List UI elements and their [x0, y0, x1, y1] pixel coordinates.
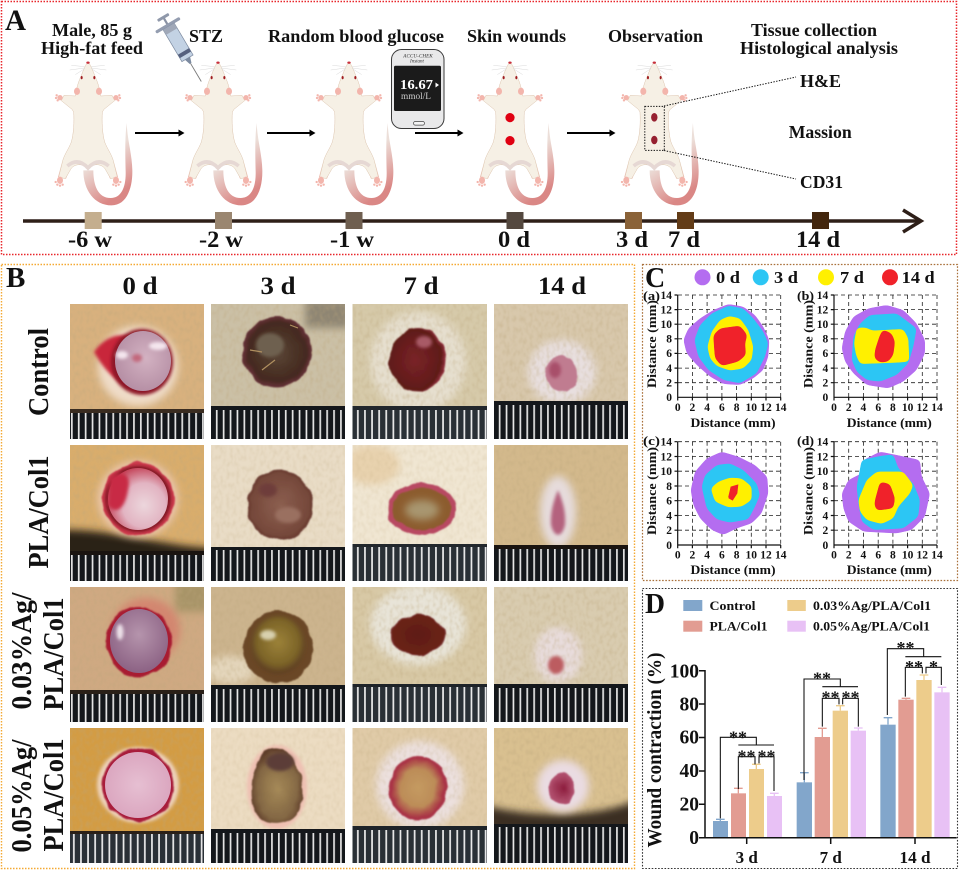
- chart (c): 6: [719, 550, 725, 562]
- y axis tick labels: 60: [680, 728, 699, 748]
- chart (d): 6: [823, 496, 829, 508]
- chart (b): 4: [823, 363, 829, 375]
- icon: glucometer: mmol/L: [401, 91, 431, 101]
- chart (c): 10: [746, 550, 757, 562]
- chart (d): Distance (mm): [800, 447, 815, 535]
- y axis tick labels: [670, 662, 699, 849]
- panel A: experimental timeline: [2, 2, 956, 254]
- chart (d): 2: [823, 525, 829, 537]
- photo: Control 0 d: [70, 304, 204, 439]
- icon: syringe: [150, 9, 213, 89]
- y axis label: Wound contraction (%): [644, 652, 666, 848]
- chart (a): 4: [666, 363, 672, 375]
- chart (c): 4: [666, 510, 672, 522]
- panel B: wound photographs: [2, 262, 638, 868]
- significance stars: **: [822, 688, 840, 708]
- chart (b): Distance (mm): [800, 300, 815, 388]
- panel letter D: D: [645, 589, 665, 620]
- chart (a): 8: [666, 334, 672, 346]
- chart (c): 12: [760, 550, 772, 562]
- chart (c): 4: [704, 550, 710, 562]
- significance stars: **: [905, 657, 923, 677]
- timeline labels: 14 d: [796, 227, 840, 252]
- chart (d): 4: [861, 550, 867, 562]
- chart (b): Distance (mm): [847, 415, 932, 430]
- row label PLA/Col1: PLA/Col1: [24, 456, 55, 568]
- photo: 0.03%Ag 14 d: [494, 587, 628, 722]
- chart (a): 12: [660, 304, 672, 316]
- chart (d): 12: [817, 452, 829, 464]
- chart (d): 0: [823, 540, 829, 552]
- photo: 0.03%Ag 0 d: [70, 587, 204, 722]
- arrow 3: [415, 130, 464, 136]
- chart (b): [797, 288, 943, 430]
- photo: Control 14 d: [494, 304, 628, 439]
- row label 0.05%Ag/PLA/Col1: [7, 738, 70, 852]
- significance stars: **: [813, 668, 831, 688]
- timeline labels: 3 d: [616, 227, 648, 252]
- photo: 0.03%Ag 7 d: [352, 587, 487, 722]
- chart (a): 14: [775, 402, 787, 414]
- heading: male high-fat feed: Male, 85 g: [52, 20, 132, 40]
- chart (d): [797, 433, 943, 577]
- timeline labels: -1 w: [330, 227, 374, 252]
- chart (b): 12: [917, 402, 928, 414]
- y axis tick labels: 80: [680, 694, 699, 716]
- label Massion: Massion: [789, 122, 852, 142]
- chart (a): Distance (mm): [644, 300, 659, 388]
- y axis tick labels: 20: [680, 794, 699, 816]
- label H&E: H&E: [800, 71, 841, 91]
- chart (b): 14: [817, 290, 829, 302]
- significance stars: **: [729, 728, 747, 748]
- chart (b): 2: [846, 402, 852, 414]
- chart (a): 0: [666, 392, 672, 404]
- chart (a): 6: [666, 348, 672, 360]
- x axis labels: 3 d: [736, 848, 758, 867]
- chart (d): 10: [817, 466, 829, 478]
- chart (c): 8: [666, 481, 672, 493]
- heading: tissue collection: Tissue collection: [751, 20, 877, 40]
- photo: 0.03%Ag 3 d: [211, 587, 345, 722]
- photo: 0.05%Ag 3 d: [211, 728, 345, 863]
- timeline labels: [68, 227, 840, 252]
- significance brackets: [720, 649, 941, 818]
- row label 0.03%Ag/PLA/Col1: [7, 591, 70, 710]
- chart (d): 10: [902, 550, 914, 562]
- significance stars: **: [896, 638, 914, 658]
- chart (b): 14: [931, 402, 943, 414]
- chart (c): 12: [660, 452, 672, 464]
- row label Control: Control: [24, 328, 55, 416]
- timeline axis: [23, 210, 921, 232]
- timeline labels: -6 w: [68, 227, 112, 252]
- chart (a): Distance (mm): [690, 415, 776, 430]
- chart (c): 14: [775, 550, 787, 562]
- chart (c): 0: [675, 550, 681, 562]
- column headers: [122, 273, 586, 300]
- chart (b): 8: [823, 334, 829, 346]
- chart (b): 12: [817, 304, 829, 316]
- significance stars: [729, 638, 938, 766]
- photo: Control 3 d: [211, 304, 345, 439]
- legend: days: 0 d: [716, 268, 741, 287]
- heading: male high-fat feed: [41, 20, 143, 58]
- chart (d): (d): [797, 433, 814, 448]
- heading: male high-fat feed: High-fat feed: [41, 38, 143, 58]
- photo: 0.05%Ag 0 d: [70, 728, 204, 863]
- chart (a): 12: [760, 402, 772, 414]
- heading: tissue collection: [740, 20, 898, 58]
- legend: days: 3 d: [774, 268, 799, 287]
- legend: groups: Control: [710, 598, 756, 613]
- legend: groups: [683, 598, 931, 634]
- timeline labels: 7 d: [668, 227, 700, 252]
- legend: days: [694, 268, 935, 287]
- chart (c): 14: [660, 437, 672, 449]
- heading: STZ: STZ: [189, 26, 223, 46]
- chart (b): 0: [831, 402, 837, 414]
- chart (a): 10: [660, 319, 672, 331]
- chart (c): (c): [643, 433, 660, 448]
- chart (c): 8: [734, 550, 740, 562]
- photo: PLA/Col1 14 d: [494, 445, 628, 581]
- panel D: wound contraction bar chart: [642, 588, 958, 868]
- chart (d): 14: [931, 550, 943, 562]
- chart (d): 4: [823, 510, 829, 522]
- panel letter C: C: [645, 263, 665, 294]
- icon: glucometer: Instant: [409, 60, 425, 64]
- photo: Control 7 d: [352, 304, 487, 439]
- significance stars: **: [842, 688, 860, 708]
- chart (d): 12: [917, 550, 928, 562]
- row label 0.03%Ag/PLA/Col1: PLA/Col1: [39, 598, 70, 710]
- chart (c): 10: [660, 466, 672, 478]
- row label 0.05%Ag/PLA/Col1: PLA/Col1: [39, 738, 70, 852]
- x axis labels: [736, 848, 931, 867]
- heading: random blood glucose: Random blood glucose: [268, 26, 444, 46]
- photo: PLA/Col1 3 d: [211, 445, 345, 581]
- significance stars: *: [929, 657, 938, 677]
- row label 0.03%Ag/PLA/Col1: 0.03%Ag/: [7, 591, 38, 710]
- panel letter A: A: [5, 4, 26, 37]
- chart (b): 0: [823, 392, 829, 404]
- y axis tick labels: 0: [689, 828, 699, 849]
- icon: rat 4 with skin wounds: [477, 62, 554, 205]
- chart (d): 8: [823, 481, 829, 493]
- icon: glucometer: 16.67: [400, 77, 433, 92]
- chart (c): Distance (mm): [690, 562, 776, 577]
- column headers: 3 d: [260, 273, 296, 300]
- legend: days: 7 d: [840, 268, 865, 287]
- label CD31: CD31: [800, 172, 843, 192]
- chart (d): 8: [890, 550, 896, 562]
- chart (b): 10: [817, 319, 829, 331]
- heading: skin wounds: Skin wounds: [467, 26, 566, 46]
- legend: groups: PLA/Col1: [710, 618, 768, 634]
- photo: 0.05%Ag 14 d: [494, 728, 628, 863]
- legend: days: 14 d: [902, 268, 935, 287]
- y axis tick labels: 40: [680, 761, 699, 782]
- significance stars: **: [758, 746, 776, 766]
- column headers: 0 d: [122, 273, 158, 300]
- arrow 1: [135, 130, 184, 136]
- column headers: 14 d: [538, 273, 586, 300]
- chart (a): (a): [643, 288, 660, 303]
- photo: PLA/Col1 0 d: [70, 445, 204, 581]
- row label 0.05%Ag/PLA/Col1: 0.05%Ag/: [7, 738, 38, 852]
- chart (d): 14: [817, 437, 829, 449]
- icon: rat 5 with sampled region: [621, 62, 699, 205]
- photo: 0.05%Ag 7 d: [352, 728, 487, 863]
- x axis labels: 14 d: [900, 848, 931, 867]
- chart (b): 10: [902, 402, 914, 414]
- chart (a): 10: [746, 402, 757, 414]
- legend: groups: 0.03%Ag/PLA/Col1: [813, 598, 931, 613]
- timeline labels: -2 w: [199, 227, 243, 252]
- legend: groups: 0.05%Ag/PLA/Col1: [813, 618, 930, 634]
- y axis tick labels: 100: [670, 662, 699, 682]
- panel C: wound closure traces: [642, 263, 958, 580]
- chart (b): 2: [823, 378, 829, 390]
- chart (c): Distance (mm): [644, 447, 659, 535]
- timeline labels: 0 d: [498, 227, 530, 252]
- photo: PLA/Col1 7 d: [352, 445, 487, 581]
- chart (a): 2: [690, 402, 696, 414]
- chart (c): 2: [690, 550, 696, 562]
- chart (b): 6: [875, 402, 881, 414]
- arrow 2: [267, 130, 316, 136]
- chart (a): [643, 288, 787, 430]
- icon: glucometer: ACCU-CHEK: [402, 54, 433, 60]
- chart (d): 6: [875, 550, 881, 562]
- chart (b): 6: [823, 348, 829, 360]
- dotted leader lines: [664, 77, 796, 179]
- chart (c): 0: [666, 540, 672, 552]
- bars and error bars: [713, 675, 950, 838]
- x axis labels: 7 d: [820, 848, 842, 867]
- arrow 4: [567, 130, 616, 136]
- chart (c): [643, 433, 787, 577]
- column headers: 7 d: [404, 273, 439, 300]
- chart (d): 2: [846, 550, 852, 562]
- chart (a): 4: [704, 402, 710, 414]
- chart (c): 2: [666, 525, 672, 537]
- chart (d): Distance (mm): [847, 562, 932, 577]
- heading: tissue collection: Histological analysis: [740, 38, 898, 58]
- icon: rat 2: [185, 62, 262, 205]
- icon: rat 1: [55, 62, 132, 205]
- chart (b): 8: [890, 402, 896, 414]
- heading: observation: Observation: [608, 26, 703, 46]
- chart (b): (b): [797, 288, 814, 303]
- chart (a): 8: [734, 402, 740, 414]
- chart (a): 14: [660, 290, 672, 302]
- chart (d): 0: [831, 550, 837, 562]
- icon: rat 3: [316, 62, 393, 205]
- icon: glucometer: [392, 50, 444, 128]
- panel letter B: B: [6, 262, 25, 294]
- chart (c): 6: [666, 496, 672, 508]
- chart (a): 2: [666, 378, 672, 390]
- chart (b): 4: [861, 402, 867, 414]
- significance stars: **: [738, 746, 756, 766]
- chart (a): 0: [675, 402, 681, 414]
- axes: [699, 670, 957, 844]
- chart (a): 6: [719, 402, 725, 414]
